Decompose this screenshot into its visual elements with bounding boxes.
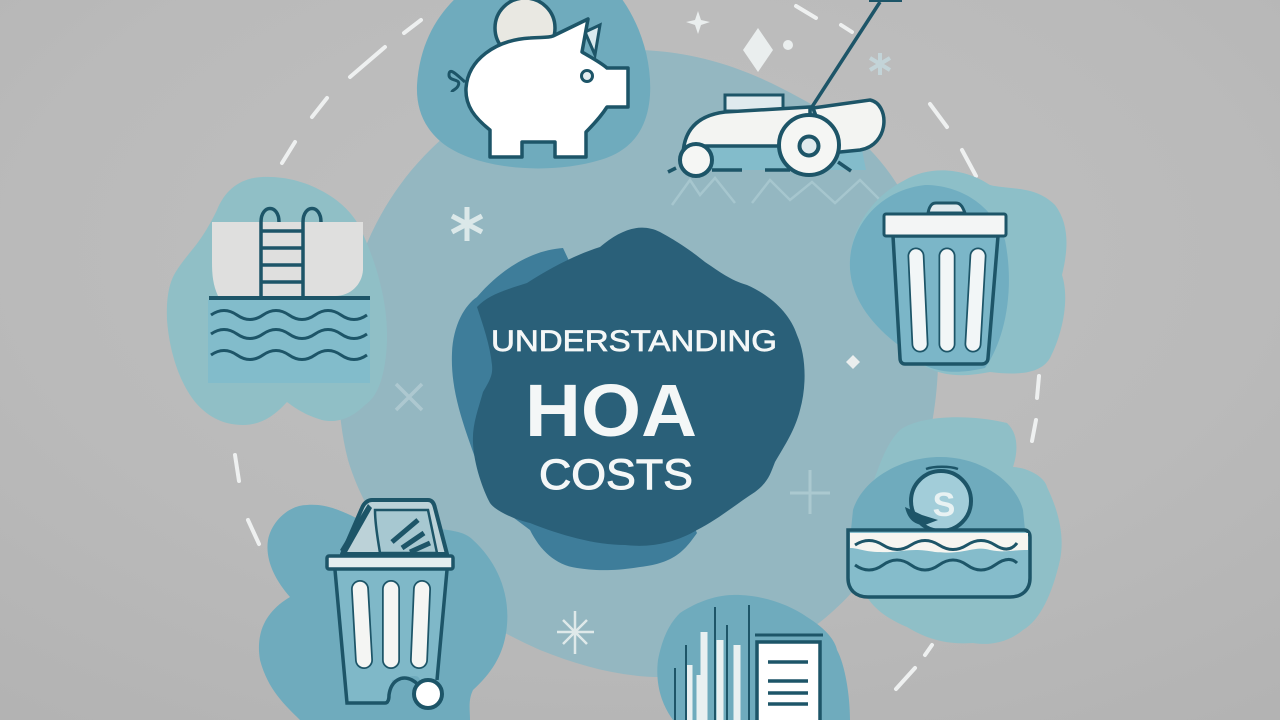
- icon: lawn mower: [668, 0, 902, 205]
- title text: HOA: [525, 369, 697, 452]
- dashed orbit ring: [235, 6, 1039, 689]
- icon: document and chart: [657, 595, 850, 720]
- icon: trash bin top right: [850, 170, 1066, 375]
- icon: recycling bin bottom left: [259, 500, 507, 720]
- center blob: [452, 228, 805, 570]
- icon: swimming pool with ladder: [167, 177, 387, 425]
- decorative sparkles: [396, 11, 890, 654]
- title text: COSTS: [539, 451, 693, 499]
- title text: UNDERSTANDING: [491, 325, 777, 358]
- icon: piggy bank: [417, 0, 650, 168]
- title text: [491, 325, 777, 499]
- icon: coin and water basin: [848, 417, 1062, 644]
- icon: coin and water basin: S: [933, 486, 955, 524]
- large central circle backdrop: [339, 50, 938, 677]
